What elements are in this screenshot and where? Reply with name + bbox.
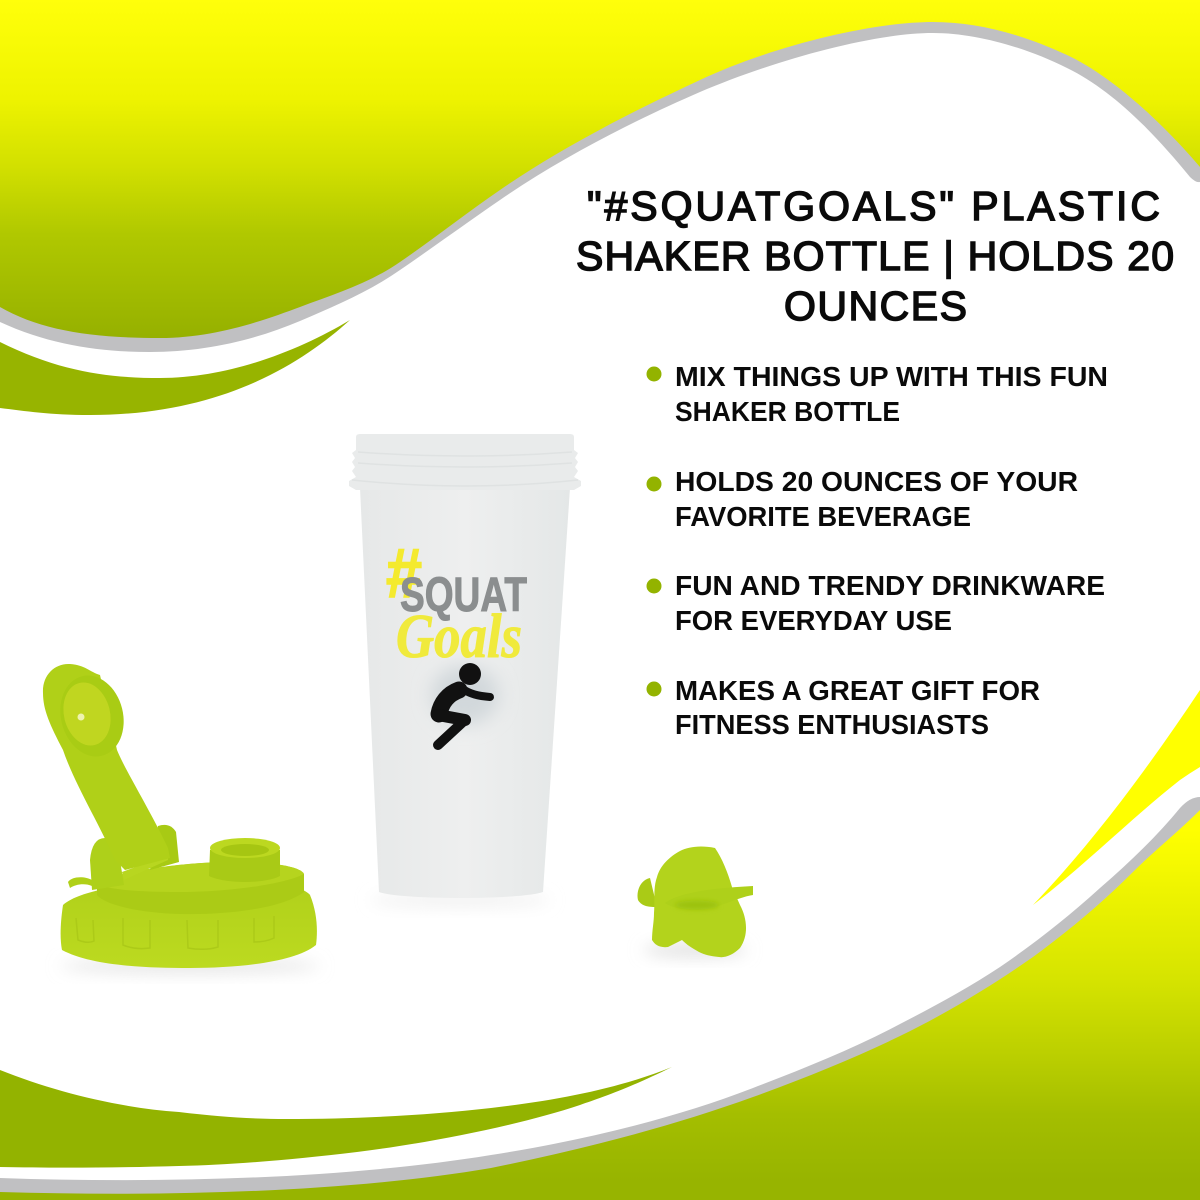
bullet 4: MAKES A GREAT GIFT FOR bbox=[675, 675, 1040, 706]
shaker bottle cup bbox=[349, 434, 581, 906]
title bbox=[576, 183, 1174, 329]
title: "#SQUATGOALS" PLASTIC bbox=[587, 183, 1160, 229]
bullet 1 bbox=[646, 361, 1108, 427]
bottle print: squat: SQUAT bbox=[400, 569, 527, 622]
bottle print: squatting figure bbox=[438, 663, 490, 745]
bottle print: hash: # bbox=[386, 534, 422, 612]
bullet 2 bbox=[646, 466, 1078, 532]
bullet 1: MIX THINGS UP WITH THIS FUN bbox=[675, 361, 1108, 392]
title: SHAKER BOTTLE | HOLDS 20 bbox=[576, 233, 1174, 279]
bullet 2: FAVORITE BEVERAGE bbox=[675, 501, 971, 532]
title: OUNCES bbox=[784, 283, 967, 329]
shaker lid bbox=[43, 664, 320, 972]
top left green swoosh bbox=[0, 320, 350, 415]
bullet 2: HOLDS 20 OUNCES OF YOUR bbox=[675, 466, 1078, 497]
bullet 3: FOR EVERYDAY USE bbox=[675, 605, 952, 636]
bullet 1: SHAKER BOTTLE bbox=[675, 396, 900, 427]
feature list bbox=[646, 361, 1108, 740]
flip cap plug bbox=[52, 669, 132, 763]
bullet 3: FUN AND TRENDY DRINKWARE bbox=[675, 570, 1105, 601]
bullet 4: FITNESS ENTHUSIASTS bbox=[675, 709, 989, 740]
shaker agitator bbox=[638, 847, 753, 957]
lid hinge bbox=[90, 825, 179, 890]
bullet 4 bbox=[646, 675, 1040, 740]
flip cap arm bbox=[43, 664, 170, 870]
top wave banner bbox=[0, 0, 1200, 352]
bullet 3 bbox=[646, 570, 1105, 636]
bottom left green swoosh bbox=[0, 1067, 672, 1168]
right yellow swoosh bbox=[1033, 690, 1200, 905]
bottom wave banner bbox=[0, 797, 1200, 1200]
lid spout bbox=[209, 838, 280, 882]
bottle print: goals: Goals bbox=[396, 603, 522, 671]
